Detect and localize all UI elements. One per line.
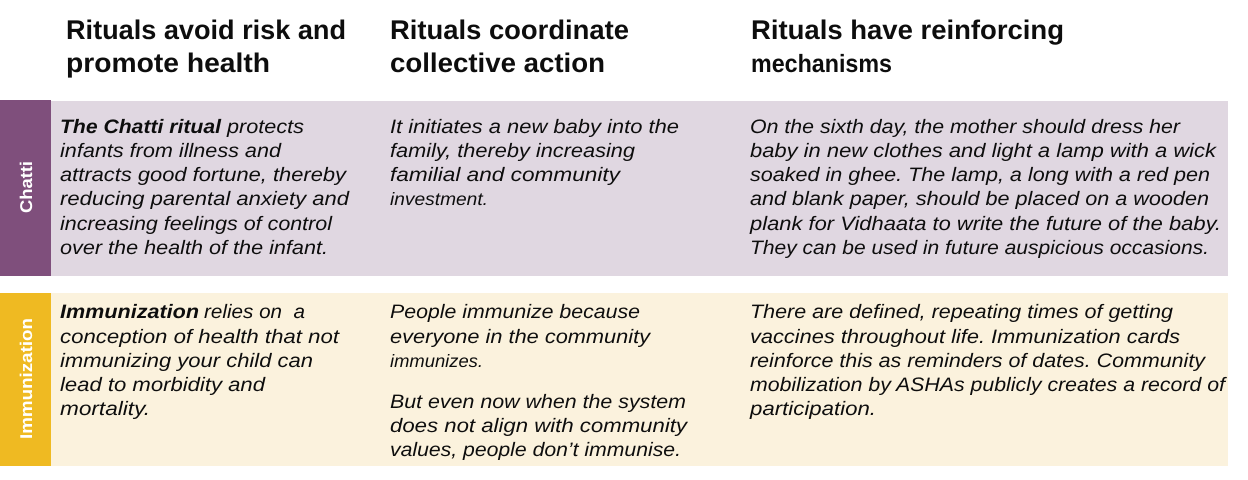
text: Immunization reinforcing mechanisms: participation. — [749, 398, 876, 420]
row label: Chatti: Chatti — [17, 161, 36, 213]
text: Immunization collective action: People immunize because — [390, 301, 640, 323]
text: Chatti risk and health: protects — [226, 116, 304, 138]
text: Immunization reinforcing mechanisms — [749, 301, 1228, 420]
text: Immunization reinforcing mechanisms: reinforce this as reminders of dates. Community — [750, 350, 1206, 372]
text: Chatti risk and health: increasing feelings of control — [60, 213, 333, 235]
text: Chatti collective action: family, thereby increasing — [390, 140, 635, 162]
text: Chatti reinforcing mechanisms: and blank paper, should be placed on a wooden — [750, 188, 1209, 210]
text: Immunization risk and health: lead to morbidity and — [60, 374, 266, 396]
column heading: reinforcing mechanisms: mechanisms — [751, 50, 892, 78]
text: Chatti collective action: investment. — [390, 189, 488, 209]
row label: Immunization: Immunization — [17, 318, 36, 439]
text: Immunization reinforcing mechanisms: vaccines throughout life. Immunization cards — [750, 326, 1180, 348]
text: Immunization risk and health: conception of health that not — [60, 326, 341, 348]
text: Immunization risk and health — [60, 301, 341, 420]
column heading: reinforcing mechanisms — [751, 15, 1064, 78]
text: Chatti reinforcing mechanisms: baby in new clothes and light a lamp with a wick — [750, 140, 1217, 162]
text: Immunization collective action: immunizes. — [390, 351, 483, 371]
text: Chatti reinforcing mechanisms — [749, 116, 1221, 259]
column heading: risk and health — [66, 15, 346, 78]
column heading: collective action: Rituals coordinate — [390, 15, 629, 45]
row label: Immunization — [0, 293, 51, 466]
column heading: collective action — [390, 15, 629, 78]
column heading: reinforcing mechanisms: Rituals have reinforcing — [751, 15, 1064, 45]
text: Immunization collective action: does not align with community — [390, 415, 688, 437]
column heading: collective action: collective action — [390, 48, 605, 78]
text: Chatti risk and health: The Chatti ritual — [60, 116, 222, 138]
text: Chatti risk and health: infants from illness and — [60, 140, 282, 162]
text: Chatti risk and health: reducing parental anxiety and — [60, 188, 350, 210]
text: Immunization reinforcing mechanisms: There are defined, repeating times of getting — [750, 301, 1173, 323]
text: Immunization collective action: values, people don’t immunise. — [390, 439, 681, 461]
text: Chatti reinforcing mechanisms: plank for Vidhaata to write the future of the baby. — [749, 213, 1221, 235]
row background: Chatti — [51, 101, 1228, 276]
row label: Chatti — [0, 100, 51, 276]
text: Chatti collective action: It initiates a new baby into the — [390, 116, 679, 138]
text: Chatti risk and health: attracts good fortune, thereby — [60, 164, 347, 186]
row panel: Chatti — [0, 100, 1228, 276]
text: Chatti reinforcing mechanisms: soaked in ghee. The lamp, a long with a red pen — [750, 164, 1210, 186]
text: Immunization collective action: everyone in the community — [390, 326, 651, 348]
column heading: risk and health: Rituals avoid risk and — [66, 15, 346, 45]
text: Chatti reinforcing mechanisms: On the sixth day, the mother should dress her — [750, 116, 1182, 138]
text: Immunization collective action: But even now when the system — [390, 391, 686, 413]
text: Immunization reinforcing mechanisms: mobilization by ASHAs publicly creates a record of — [750, 374, 1228, 396]
row background: Immunization — [51, 293, 1228, 466]
column heading: risk and health: promote health — [66, 48, 270, 78]
text: Chatti collective action — [390, 116, 679, 209]
text: Chatti risk and health — [60, 116, 350, 259]
text: Immunization risk and health: immunizing your child can — [60, 350, 313, 372]
text: Immunization risk and health: Immunization — [60, 301, 199, 323]
text: Immunization collective action — [390, 301, 688, 461]
text: Chatti collective action: familial and community — [390, 164, 621, 186]
text: Immunization risk and health: relies on a — [204, 301, 305, 323]
text: Chatti risk and health: over the health of the infant. — [60, 237, 328, 259]
text: Immunization risk and health: mortality. — [60, 398, 150, 420]
row panel: Immunization — [0, 293, 1228, 466]
text: Chatti reinforcing mechanisms: They can be used in future auspicious occasions. — [750, 237, 1209, 259]
